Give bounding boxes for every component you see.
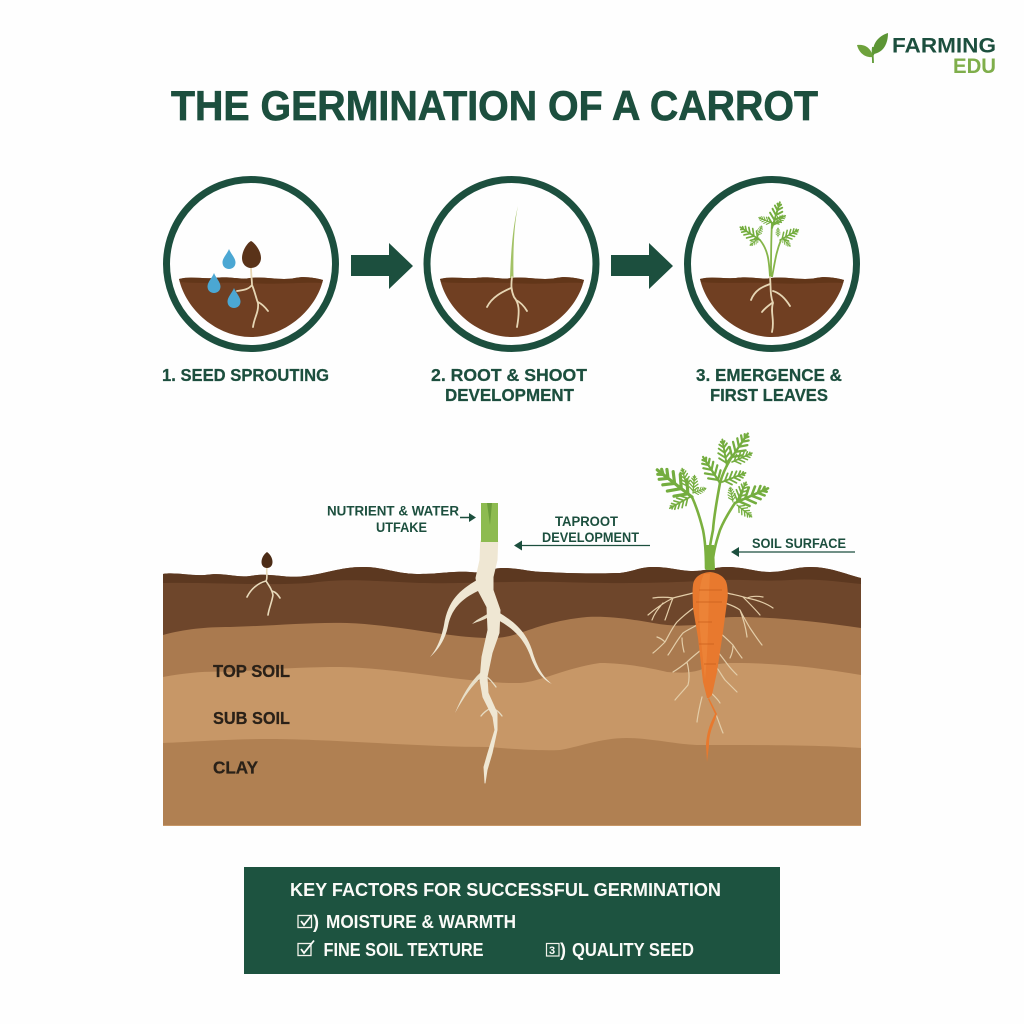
layer: second soil band [163, 617, 861, 826]
callout: taproot development [514, 514, 650, 550]
mature carrot with leaves [648, 429, 773, 762]
item: quality seed: ) [560, 940, 566, 960]
callout: soil surface: SOIL SURFACE [752, 536, 846, 551]
item: fine soil texture: FINE SOIL TEXTURE [324, 940, 484, 960]
callout: taproot development: TAPROOT [555, 514, 619, 529]
step 1: seed sprouting [166, 180, 336, 348]
step labels [162, 365, 842, 405]
logo: Farming Edu: FARMING [892, 34, 996, 58]
arrow 1 [351, 243, 413, 289]
item: moisture and warmth: MOISTURE & WARMTH [326, 912, 516, 932]
step labels: 3. EMERGENCE & [696, 365, 842, 385]
soil layer labels: TOP SOIL [213, 661, 290, 681]
layer: third soil band [163, 663, 861, 826]
callout: nutrient and water uptake [327, 504, 476, 535]
seedling in soil [247, 552, 280, 615]
step labels: FIRST LEAVES [710, 385, 828, 405]
soil layer labels: CLAY [213, 758, 258, 778]
panel: key factors [244, 867, 780, 974]
step labels: 2. ROOT & SHOOT [431, 365, 587, 385]
callout: soil surface [731, 536, 855, 557]
soil layer labels [213, 661, 290, 778]
item: moisture and warmth: ) [313, 912, 319, 932]
callout: nutrient and water uptake: UTFAKE [376, 520, 427, 535]
layer: clay band [163, 738, 861, 825]
panel heading: KEY FACTORS FOR SUCCESSFUL GERMINATION [290, 880, 721, 900]
soil cross-section [163, 567, 861, 826]
logo: Farming Edu [857, 33, 996, 78]
item: quality seed: 3 [549, 945, 555, 957]
item: quality seed: QUALITY SEED [572, 940, 694, 960]
developing taproot [430, 503, 552, 783]
step 3: emergence and first leaves [688, 180, 856, 348]
step labels: DEVELOPMENT [445, 385, 574, 405]
title: THE GERMINATION OF A CARROT [171, 82, 818, 129]
step 2: root and shoot development [427, 180, 596, 348]
step labels: 1. SEED SPROUTING [162, 365, 329, 385]
callout: taproot development: DEVELOPMENT [542, 530, 640, 545]
logo: Farming Edu: EDU [953, 55, 996, 78]
soil layer labels: SUB SOIL [213, 708, 290, 728]
callout: nutrient and water uptake: NUTRIENT & WATER [327, 504, 459, 518]
arrow 2 [611, 243, 673, 289]
